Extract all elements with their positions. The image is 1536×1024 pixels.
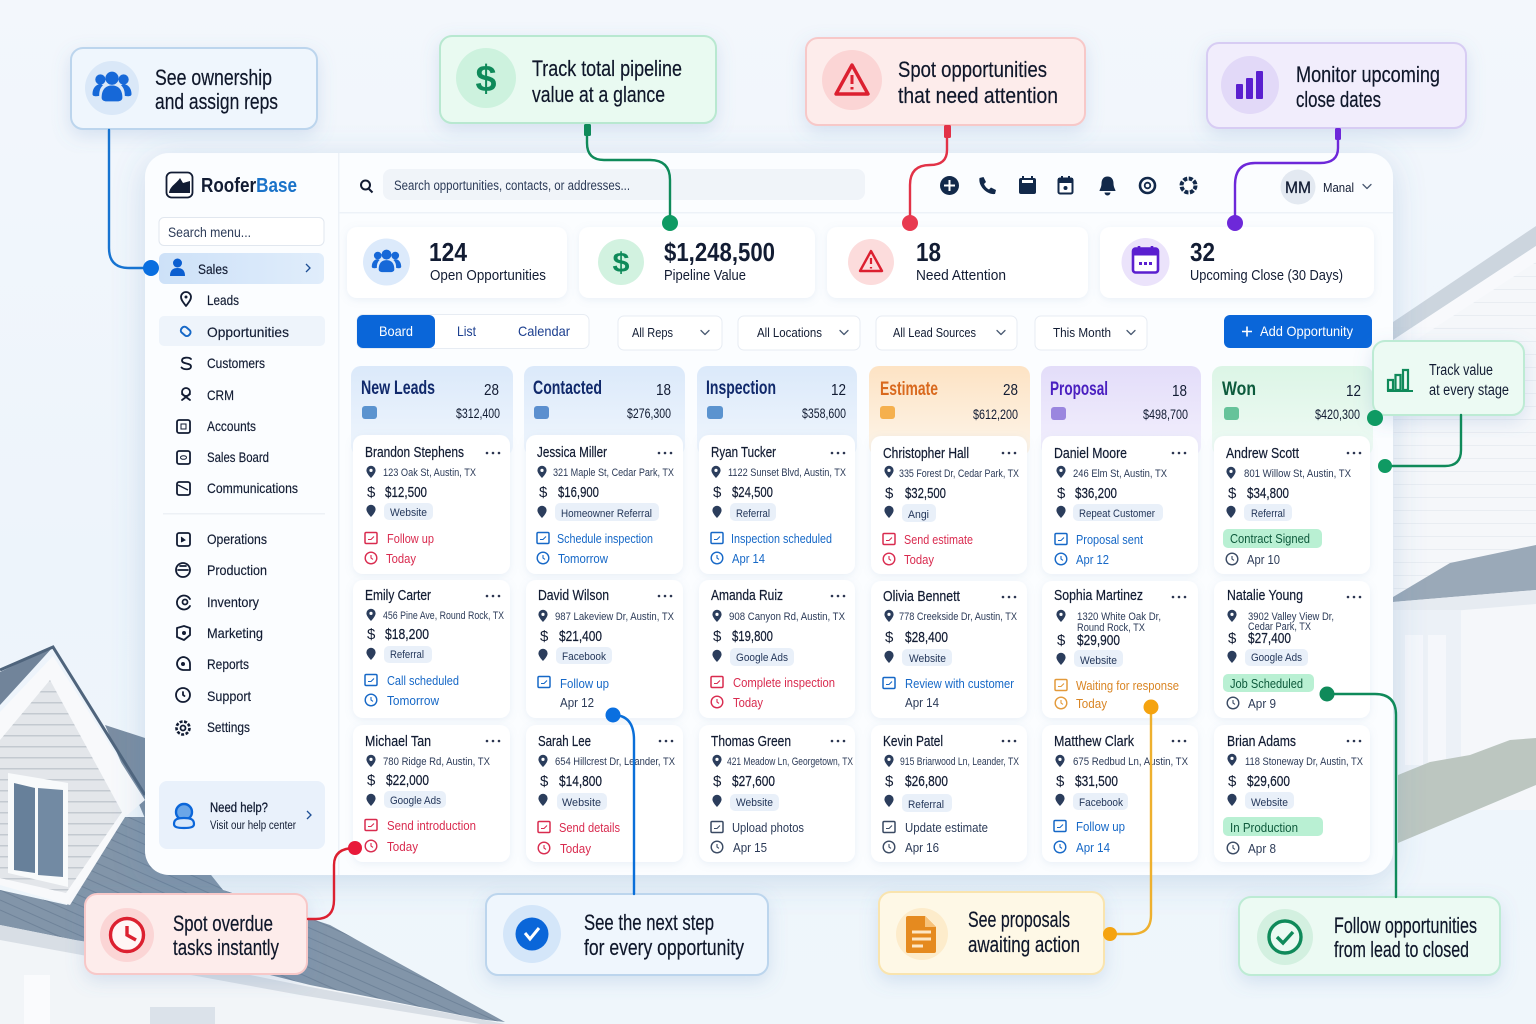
KPI: upcoming close: Upcoming Close (30 Days): [1190, 268, 1343, 284]
card: Brandon Stephens: $: [367, 484, 376, 501]
card: Ryan Tucker: 1122 Sunset Blvd, Austin, TX: [728, 467, 847, 479]
card: Andrew Scott: 801 Willow St, Austin, TX: [1244, 468, 1352, 480]
callout: see ownership: See ownership: [155, 65, 272, 90]
filter: locations: [738, 316, 860, 350]
card: Sophia Martinez: $29,900: [1077, 632, 1120, 649]
connector: follow opportunities to Job Scheduled: [1320, 686, 1396, 897]
column: New Leads: New Leads: [361, 377, 435, 399]
card: Emily Carter: 456 Pine Ave, Round Rock, TX: [383, 610, 505, 622]
callout: follow opportunities: [1239, 897, 1500, 975]
card: Jessica Miller: $16,900: [558, 484, 599, 501]
card: Sarah Lee: $14,800: [559, 773, 602, 790]
callout: track value: Track value: [1429, 362, 1493, 379]
callout: see the next step: for every opportunity: [584, 935, 744, 960]
illustration: right house: [1393, 226, 1536, 843]
callout: track total pipeline: [440, 36, 716, 123]
card: Jessica Miller: [526, 435, 683, 574]
callout: spot opportunities: [806, 38, 1085, 125]
filter: locations: All Locations: [757, 325, 822, 340]
connector: ownership to Sales: [109, 130, 159, 276]
column: Won: Won: [1222, 378, 1256, 400]
card: Matthew Clark: [1042, 725, 1198, 862]
callout: track value: at every stage: [1429, 382, 1509, 399]
card: Sophia Martinez: [1042, 581, 1198, 718]
card: Sophia Martinez: 1320 White Oak Dr,: [1077, 611, 1161, 623]
KPI: need attention: [827, 227, 1088, 298]
nav item: Accounts: [177, 418, 256, 434]
card: Brian Adams: Apr 8: [1248, 842, 1276, 856]
filter: this month: This Month: [1053, 325, 1111, 340]
card: Kevin Patel: [871, 725, 1027, 862]
view tabs: Board: [379, 323, 413, 339]
card: Brandon Stephens: Today: [386, 552, 417, 566]
column: Proposal: $498,700: [1143, 407, 1188, 422]
card: Brandon Stephens: [353, 435, 510, 574]
card: Sophia Martinez: Website: [1080, 655, 1117, 667]
card: Matthew Clark: $31,500: [1075, 773, 1118, 790]
user menu: [1280, 170, 1371, 204]
nav item: Reports: Reports: [207, 656, 249, 672]
card: Brandon Stephens: Website: [390, 507, 427, 519]
filter: reps: All Reps: [632, 325, 673, 340]
nav item: Support: Support: [207, 688, 251, 704]
card: David Wilson: $: [540, 628, 549, 645]
main app panel: [145, 153, 1393, 875]
card: Natalie Young: 3902 Valley View Dr,: [1248, 611, 1334, 623]
connector: proposals to Waiting: [1103, 700, 1158, 941]
card: Ryan Tucker: [699, 435, 855, 574]
icon: gear: [1182, 178, 1196, 192]
icon: bell: [1100, 176, 1116, 196]
KPI row: [347, 227, 1374, 298]
icon: phone: [979, 177, 996, 194]
connector: next step to Follow up: [606, 708, 634, 894]
card: Michael Tan: $22,000: [386, 772, 429, 789]
card: Natalie Young: $27,400: [1248, 630, 1291, 647]
view tabs: [357, 314, 589, 348]
card: Ryan Tucker: Apr 14: [732, 552, 765, 566]
card: David Wilson: Apr 12: [560, 696, 594, 710]
connector: pipeline to KPI: [584, 124, 678, 231]
nav item: Accounts: Accounts: [207, 418, 256, 434]
card: Olivia Bennett: 778 Creekside Dr, Austin, TX: [899, 611, 1018, 623]
nav item: Operations: Operations: [207, 531, 267, 547]
card: Brian Adams: 118 Stoneway Dr, Austin, TX: [1245, 756, 1364, 768]
card: Michael Tan: Today: [387, 840, 419, 854]
nav item: Communications: Communications: [207, 480, 298, 496]
card: Jessica Miller: Jessica Miller: [537, 445, 607, 461]
card: Daniel Moore: [1042, 436, 1198, 574]
card: Amanda Ruiz: Google Ads: [736, 652, 788, 664]
KPI: open opportunities: [347, 227, 567, 298]
card: Thomas Green: Apr 15: [733, 841, 767, 855]
nav item: CRM: [182, 387, 234, 403]
KPI: upcoming close: [1100, 227, 1374, 298]
card: Emily Carter: Referral: [390, 649, 424, 661]
card: Christopher Hall: Today: [904, 553, 935, 567]
illustration: left house: [0, 647, 510, 1024]
nav item: Communications: [177, 480, 298, 496]
column: Inspection: Inspection: [706, 377, 776, 399]
card: Olivia Bennett: $: [885, 629, 894, 646]
column: Won: [1212, 366, 1373, 456]
card: Olivia Bennett: Olivia Bennett: [883, 589, 960, 605]
card: Ryan Tucker: Ryan Tucker: [711, 445, 776, 461]
KPI: pipeline value: $1,248,500: [664, 237, 775, 267]
callout: track total pipeline: Track total pipeline: [532, 56, 682, 81]
card: Brian Adams: Website: [1251, 797, 1288, 809]
card: Brandon Stephens: Brandon Stephens: [365, 445, 464, 461]
column: Won: $420,300: [1315, 407, 1360, 422]
user menu: Manal: [1323, 180, 1354, 195]
column: Proposal: [1041, 366, 1201, 456]
card: Brian Adams: $: [1228, 773, 1237, 790]
card: Natalie Young: Cedar Park, TX: [1248, 621, 1312, 633]
card: Sarah Lee: Today: [560, 842, 592, 856]
nav item: Operations: [177, 531, 267, 547]
column: Contacted: $276,300: [627, 406, 671, 421]
view tabs: List: [457, 323, 476, 339]
card: Natalie Young: Natalie Young: [1227, 588, 1303, 604]
card: Andrew Scott: Andrew Scott: [1226, 446, 1299, 462]
nav item: Production: Production: [207, 562, 267, 578]
card: David Wilson: [526, 580, 683, 718]
card: Emily Carter: $: [367, 626, 376, 643]
card: Brian Adams: [1214, 725, 1370, 862]
card: Christopher Hall: $32,500: [905, 485, 946, 502]
logo: RooferBase: [201, 175, 297, 197]
card: Brian Adams: Brian Adams: [1227, 734, 1296, 750]
card: Sarah Lee: Website: [562, 797, 601, 809]
callout: see ownership: [71, 48, 317, 129]
card: Sarah Lee: Send details: [559, 821, 620, 835]
card: Natalie Young: Google Ads: [1251, 652, 1302, 664]
card: Amanda Ruiz: Today: [733, 696, 764, 710]
card: Amanda Ruiz: [699, 580, 855, 718]
filter: lead sources: [876, 316, 1017, 350]
card: Brandon Stephens: Follow up: [387, 532, 434, 546]
nav item: Production: [176, 562, 267, 578]
card: Emily Carter: Call scheduled: [387, 674, 459, 688]
card: Thomas Green: $27,600: [732, 773, 775, 790]
card: Daniel Moore: Apr 12: [1076, 553, 1109, 567]
card: Emily Carter: [353, 580, 510, 718]
KPI: pipeline value: $: [612, 247, 630, 278]
card: Jessica Miller: Schedule inspection: [557, 532, 653, 546]
callout: follow opportunities: from lead to closed: [1334, 937, 1469, 962]
callout: see the next step: See the next step: [584, 910, 714, 935]
card: Daniel Moore: Proposal sent: [1076, 533, 1143, 547]
card: Michael Tan: [353, 725, 510, 862]
callout: track total pipeline: $: [476, 58, 497, 99]
card: Ryan Tucker: $: [713, 484, 722, 501]
card: Matthew Clark: 675 Redbud Ln, Austin, TX: [1073, 756, 1189, 768]
user menu: MM: [1285, 178, 1311, 197]
card: Brian Adams: In Production: [1230, 821, 1298, 835]
callout: see proposals: [879, 892, 1104, 974]
card: Kevin Patel: Referral: [908, 799, 944, 811]
KPI: pipeline value: Pipeline Value: [664, 268, 746, 284]
nav item: Sales: Sales: [198, 261, 228, 277]
icon: at: [1140, 178, 1155, 193]
nav item: Leads: [181, 292, 239, 308]
card: Amanda Ruiz: Complete inspection: [733, 676, 835, 690]
card: Kevin Patel: Kevin Patel: [883, 734, 943, 750]
callout: spot overdue tasks: [85, 894, 307, 974]
card: Matthew Clark: Follow up: [1076, 820, 1125, 834]
search menu: [159, 218, 324, 246]
card: Jessica Miller: Homeowner Referral: [561, 508, 652, 520]
nav item: Customers: [182, 355, 265, 371]
column: Inspection: [697, 366, 857, 456]
callout: see proposals: See proposals: [968, 907, 1070, 932]
callout: spot opportunities: Spot opportunities: [898, 57, 1047, 82]
card: Andrew Scott: Referral: [1251, 508, 1285, 520]
card: Natalie Young: Job Scheduled: [1230, 677, 1303, 691]
card: Kevin Patel: Update estimate: [905, 821, 988, 835]
filter: reps: [618, 316, 722, 350]
card: Daniel Moore: 246 Elm St, Austin, TX: [1073, 468, 1168, 480]
column: Estimate: 28: [1003, 382, 1018, 399]
nav item: Marketing: [177, 625, 263, 641]
icon: add: [940, 176, 959, 195]
filter: lead sources: All Lead Sources: [893, 325, 976, 340]
column: Contacted: 18: [656, 382, 671, 399]
card: Brandon Stephens: 123 Oak St, Austin, TX: [383, 467, 477, 479]
callout: track total pipeline: value at a glance: [532, 82, 665, 107]
card: David Wilson: Facebook: [562, 651, 606, 663]
connector: track value to Won column: [1367, 410, 1461, 473]
card: Kevin Patel: $26,800: [905, 773, 948, 790]
card: Emily Carter: Tomorrow: [387, 694, 440, 708]
callout: spot overdue tasks: tasks instantly: [173, 935, 279, 960]
connector: overdue tasks to Today: [308, 841, 362, 919]
nav item: Reports: [177, 656, 249, 672]
sidebar: [159, 172, 325, 849]
connector: attention to KPI: [902, 125, 951, 231]
card: Andrew Scott: $34,800: [1247, 485, 1289, 502]
card: Kevin Patel: 915 Briarwood Ln, Leander, TX: [900, 756, 1020, 768]
column: New Leads: [351, 366, 513, 456]
card: Daniel Moore: $36,200: [1075, 485, 1117, 502]
nav item: Opportunities: [159, 316, 325, 346]
card: Thomas Green: [699, 725, 855, 862]
card: Sophia Martinez: Round Rock, TX: [1077, 622, 1146, 634]
card: Brandon Stephens: $12,500: [385, 484, 427, 501]
callout: see ownership: and assign reps: [155, 89, 278, 114]
card: Daniel Moore: $: [1057, 485, 1066, 502]
nav item: Customers: Customers: [207, 355, 265, 371]
top bar: [361, 169, 1371, 204]
card: Ryan Tucker: $24,500: [732, 484, 773, 501]
card: Michael Tan: Google Ads: [390, 795, 441, 807]
card: Amanda Ruiz: Amanda Ruiz: [711, 588, 783, 604]
callout: track value: [1373, 341, 1524, 415]
callout: see the next step: [486, 894, 768, 975]
card: Thomas Green: $: [713, 773, 722, 790]
card: Olivia Bennett: Website: [909, 653, 946, 665]
column: Inspection: $358,600: [802, 406, 846, 421]
KPI: need attention: Need Attention: [916, 268, 1006, 284]
card: Olivia Bennett: [871, 581, 1027, 718]
card: Kevin Patel: $: [885, 773, 894, 790]
KPI: need attention: 18: [916, 237, 941, 267]
callout: follow opportunities: Follow opportunities: [1334, 913, 1477, 938]
card: Christopher Hall: Christopher Hall: [883, 446, 969, 462]
card: Natalie Young: [1214, 581, 1370, 718]
card: Jessica Miller: $: [539, 484, 548, 501]
card: Sarah Lee: [526, 725, 683, 862]
search bar: [361, 169, 865, 200]
card: Christopher Hall: Send estimate: [904, 533, 973, 547]
card: Sarah Lee: $: [540, 773, 549, 790]
card: Christopher Hall: 335 Forest Dr, Cedar Park, TX: [899, 468, 1020, 480]
nav item: Inventory: Inventory: [207, 594, 259, 610]
logo: [166, 172, 297, 198]
column: Estimate: [869, 366, 1030, 456]
help center card: [159, 781, 325, 849]
card: Matthew Clark: Apr 14: [1076, 841, 1110, 855]
callout: monitor upcoming: [1207, 43, 1466, 128]
card: Sophia Martinez: Waiting for response: [1076, 679, 1179, 693]
card: Michael Tan: 780 Ridge Rd, Austin, TX: [383, 756, 491, 768]
connector: close dates to KPI: [1227, 128, 1341, 231]
card: Jessica Miller: 321 Maple St, Cedar Park, TX: [553, 467, 675, 479]
card: David Wilson: Follow up: [560, 677, 609, 691]
KPI: open opportunities: Open Opportunities: [430, 268, 546, 284]
card: Amanda Ruiz: 908 Canyon Rd, Austin, TX: [729, 611, 846, 623]
filter: this month: [1035, 316, 1147, 350]
add opportunity button: [1224, 315, 1372, 348]
callout: see proposals: awaiting action: [968, 932, 1080, 957]
help center card: Visit our help center: [210, 820, 296, 832]
card: David Wilson: 987 Lakeview Dr, Austin, TX: [555, 611, 675, 623]
nav item: Sales: [159, 253, 324, 284]
column: New Leads: 28: [484, 382, 499, 399]
card: Ryan Tucker: Inspection scheduled: [731, 532, 832, 546]
card: Matthew Clark: Matthew Clark: [1054, 734, 1135, 750]
card: Michael Tan: Michael Tan: [365, 734, 431, 750]
card: Emily Carter: $18,200: [385, 626, 429, 643]
KPI: upcoming close: 32: [1190, 237, 1215, 267]
card: Thomas Green: 421 Meadow Ln, Georgetown, TX: [727, 756, 853, 768]
card: Sarah Lee: 654 Hillcrest Dr, Leander, TX: [555, 756, 676, 768]
card: Emily Carter: Emily Carter: [365, 588, 431, 604]
column: Contacted: [524, 366, 685, 456]
search bar: Search opportunities, contacts, or addresses...: [394, 178, 630, 193]
column: Estimate: Estimate: [880, 378, 938, 400]
card: David Wilson: $21,400: [559, 628, 602, 645]
card: Olivia Bennett: Apr 14: [905, 696, 939, 710]
help center card: Need help?: [210, 799, 268, 815]
card: Kevin Patel: Apr 16: [905, 841, 939, 855]
callout: monitor upcoming: close dates: [1296, 87, 1381, 112]
card: Christopher Hall: [871, 436, 1027, 574]
card: Sophia Martinez: Today: [1076, 697, 1108, 711]
card: Daniel Moore: Repeat Customer: [1079, 508, 1155, 520]
card: Michael Tan: Send introduction: [387, 819, 476, 833]
card: Amanda Ruiz: $: [713, 628, 722, 645]
add opportunity button: Add Opportunity: [1260, 323, 1353, 339]
callout: spot overdue tasks: Spot overdue: [173, 911, 273, 936]
card: Andrew Scott: [1214, 436, 1370, 574]
card: Michael Tan: $: [367, 772, 376, 789]
card: Natalie Young: $: [1228, 630, 1237, 647]
card: Olivia Bennett: Review with customer: [905, 677, 1014, 691]
card: Andrew Scott: Contract Signed: [1230, 532, 1310, 546]
card: Matthew Clark: $: [1056, 773, 1065, 790]
nav item: Leads: Leads: [207, 292, 239, 308]
search menu: Search menu...: [168, 224, 251, 240]
column: Proposal: 18: [1172, 383, 1187, 400]
nav item: Marketing: Marketing: [207, 625, 263, 641]
card: Christopher Hall: $: [885, 485, 894, 502]
column: Inspection: 12: [831, 382, 846, 399]
card: Thomas Green: Upload photos: [732, 821, 804, 835]
card: Amanda Ruiz: $19,800: [732, 628, 773, 645]
card: Matthew Clark: Facebook: [1079, 797, 1123, 809]
card: Christopher Hall: Angi: [908, 509, 929, 521]
column: Proposal: Proposal: [1050, 378, 1108, 400]
card: Sophia Martinez: $: [1057, 632, 1066, 649]
nav item: Sales Board: Sales Board: [207, 449, 269, 465]
nav item: Opportunities: Opportunities: [207, 324, 289, 340]
nav item: Support: [176, 688, 251, 704]
nav item: Settings: Settings: [207, 719, 250, 735]
nav item: Inventory: [177, 594, 259, 610]
KPI: pipeline value: [579, 227, 815, 298]
callout: spot opportunities: that need attention: [898, 83, 1058, 108]
nav item: CRM: CRM: [207, 387, 234, 403]
card: Sophia Martinez: Sophia Martinez: [1054, 588, 1143, 604]
nav item: Sales Board: [177, 449, 269, 465]
column: Estimate: $612,200: [973, 407, 1018, 422]
column: New Leads: $312,400: [456, 406, 500, 421]
card: Jessica Miller: Tomorrow: [558, 552, 609, 566]
card: Thomas Green: Website: [736, 797, 773, 809]
card: Sarah Lee: Sarah Lee: [538, 734, 591, 750]
card: David Wilson: David Wilson: [538, 588, 609, 604]
card: Ryan Tucker: Referral: [736, 508, 770, 520]
view tabs: Calendar: [518, 323, 570, 339]
card: Daniel Moore: Daniel Moore: [1054, 446, 1127, 462]
column: Won: 12: [1346, 383, 1361, 400]
icon: schedule: [1058, 176, 1073, 194]
card: Thomas Green: Thomas Green: [711, 734, 791, 750]
column: Contacted: Contacted: [533, 377, 602, 399]
card: Natalie Young: Apr 9: [1248, 697, 1276, 711]
icon: calendar: [1019, 176, 1036, 194]
card: Olivia Bennett: $28,400: [905, 629, 948, 646]
card: Andrew Scott: Apr 10: [1247, 553, 1280, 567]
card: Brian Adams: $29,600: [1247, 773, 1290, 790]
nav item: Settings: [176, 719, 250, 735]
KPI: open opportunities: 124: [429, 237, 467, 267]
callout: monitor upcoming: Monitor upcoming: [1296, 62, 1440, 87]
card: Andrew Scott: $: [1228, 485, 1237, 502]
